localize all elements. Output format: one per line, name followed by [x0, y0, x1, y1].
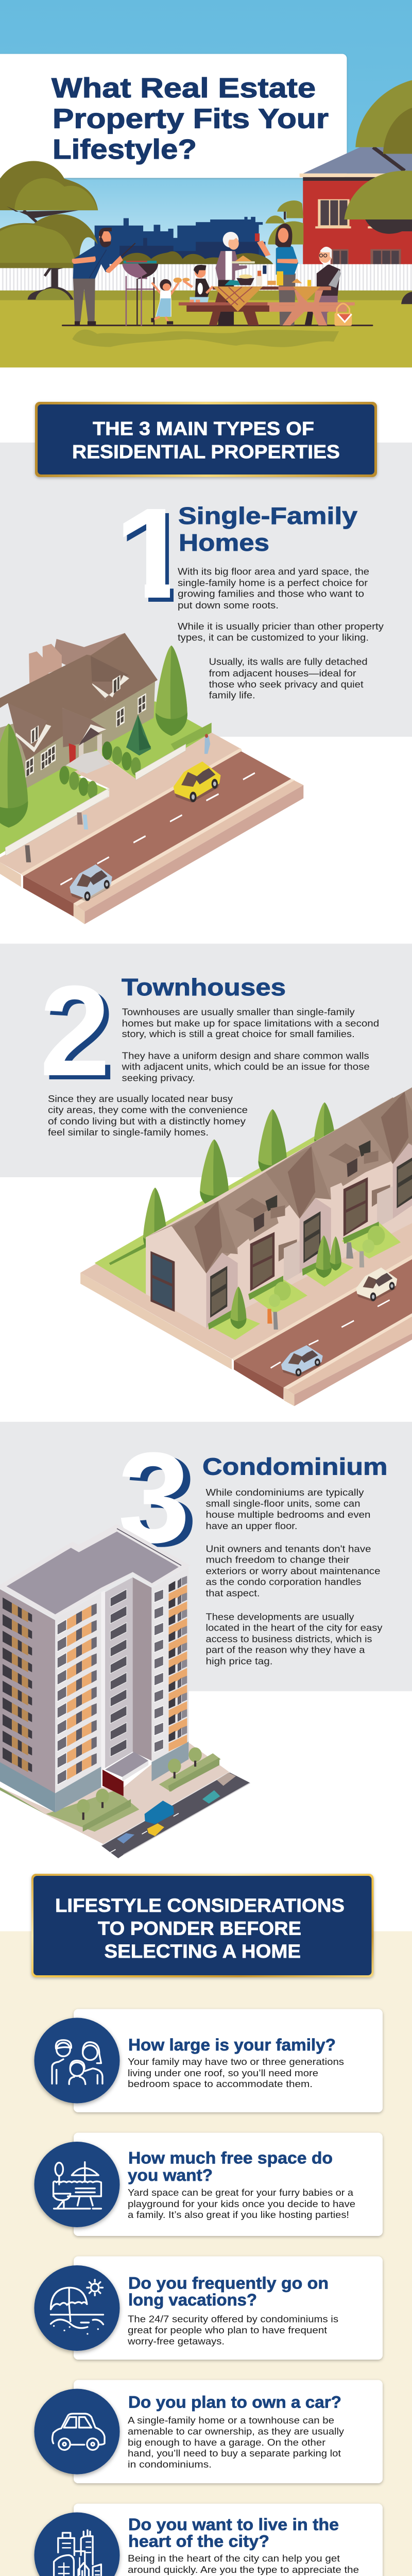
illustration: condominium tower	[0, 1524, 250, 1858]
text block: townhouses description: of condo living but with a distinctly homey	[48, 1116, 246, 1126]
person: boy	[183, 265, 213, 309]
icon: yard with picnic table	[54, 2162, 101, 2209]
section banner: 3 main types: THE 3 MAIN TYPES OF	[93, 418, 314, 439]
text block: condominium description: small single-floor units, some can	[206, 1498, 360, 1509]
text block: townhouses description: with adjacent units, which could be an issue for those	[122, 1062, 370, 1072]
text block: single-family description: Usually, its walls are fully detached	[209, 656, 368, 667]
card: car ownership	[34, 2380, 383, 2483]
grill	[122, 261, 158, 326]
icon: beach umbrella and sun	[50, 2280, 103, 2334]
text block: condominium description: have an upper floor.	[206, 1521, 298, 1531]
numeral 3: 3	[125, 1429, 197, 1573]
numeral 2: 2	[45, 963, 115, 1107]
vehicles on condo street	[117, 1772, 236, 1843]
heading: condominium: Condominium	[202, 1453, 388, 1480]
person: man grilling	[72, 228, 135, 326]
front gardens and shrubs	[208, 1222, 401, 1340]
card: vacations: great for people who plan to have frequent	[128, 2325, 327, 2335]
numeral 1: 1	[114, 481, 191, 625]
card: vacations	[34, 2257, 383, 2360]
card: free space: Yard space can be great for your furry babies or a	[128, 2187, 354, 2198]
city skyline	[95, 217, 265, 264]
card: heart of the city: around quickly. Are you the type to appreciate the	[128, 2564, 359, 2575]
numeral 1	[124, 509, 174, 602]
text block: condominium description: as the condo corporation handles	[206, 1577, 362, 1587]
card: vacations: worry-free getaways.	[127, 2336, 225, 2346]
pedestrians	[25, 734, 210, 862]
card: free space: a family. It’s also great if you like hosting parties!	[128, 2209, 349, 2220]
heading: single-family homes: Homes	[179, 529, 269, 556]
text block: condominium description: located in the heart of the city for easy	[206, 1623, 382, 1633]
street and grounds	[0, 1743, 250, 1858]
pedestrians	[267, 1242, 364, 1330]
card: vacations: Do you frequently go on	[128, 2274, 329, 2292]
section banner: 3 main types	[35, 402, 377, 477]
person: woman with drink	[255, 224, 298, 326]
section banner: lifestyle considerations: SELECTING A HOME	[104, 1941, 301, 1962]
card: car ownership: in condominiums.	[128, 2459, 212, 2470]
text block: single-family description: growing families and those who want to	[178, 588, 364, 599]
heading: single-family homes	[178, 502, 357, 556]
icon: city buildings	[54, 2530, 101, 2576]
text block: townhouses description: city areas, they come with the convenience	[48, 1105, 248, 1115]
card: free space: How much free space do	[128, 2148, 333, 2167]
right trees	[344, 80, 412, 304]
bush line behind fence	[119, 251, 273, 264]
card: family size: Your family may have two or three generations	[128, 2056, 344, 2067]
card: heart of the city: Do you want to live in the	[128, 2515, 339, 2534]
text block: condominium description: exteriors or worry about maintenance	[206, 1566, 380, 1576]
card: car ownership: A single-family home or a townhouse can be	[128, 2415, 334, 2426]
text block: single-family description: those who seek privacy and quiet	[209, 679, 364, 689]
title text: Lifestyle?	[53, 134, 197, 165]
section banner: lifestyle considerations: TO PONDER BEFORE	[98, 1918, 301, 1939]
title text: Property Fits Your	[53, 103, 329, 134]
text block: single-family description: While it is usually pricier than other property	[178, 621, 384, 632]
numeral 3: 3	[118, 1426, 190, 1569]
illustration: row of townhouses and street	[80, 1065, 412, 1406]
white picket fences	[5, 744, 186, 856]
text block: townhouses description: story, which is still a great choice for small families.	[122, 1029, 355, 1039]
text block: townhouses description: Townhouses are usually smaller than single-family	[122, 1007, 355, 1017]
text block: condominium description: While condominiums are typically	[206, 1487, 364, 1498]
text block: townhouses description: seeking privacy.	[122, 1073, 195, 1083]
text block: townhouses description: homes but make up for space limitations with a second	[122, 1018, 379, 1028]
card: free space	[34, 2133, 383, 2236]
text block: single-family description: With its big floor area and yard space, the	[178, 567, 369, 577]
blue car	[281, 1345, 323, 1377]
card: family size	[34, 2009, 383, 2112]
icon: car	[53, 2414, 105, 2450]
card: heart of the city: Being in the heart of the city can help you get	[128, 2553, 340, 2564]
text block: condominium description	[206, 1487, 382, 1666]
panel: townhouses background	[0, 944, 412, 1177]
trees and shrubs	[0, 646, 187, 827]
lawn	[0, 291, 412, 367]
text block: condominium description: house multiple bedrooms and even	[206, 1510, 371, 1520]
person: grandmother	[215, 232, 255, 326]
small trees behind house	[265, 200, 303, 244]
text block: single-family description: types, it can be customized to your liking.	[178, 632, 369, 642]
text block: townhouses description: Since they are usually located near busy	[48, 1094, 233, 1104]
card: free space: playground for your kids once you decide to have	[128, 2198, 355, 2209]
text block: townhouses description: They have a uniform design and share common walls	[122, 1050, 369, 1061]
card: family size: How large is your family?	[128, 2036, 336, 2054]
card: heart of the city: heart of the city?	[128, 2532, 269, 2551]
card: car ownership: hand, you’ll need to buy a separate parking lot	[128, 2448, 341, 2459]
title card	[0, 54, 347, 178]
text block: condominium description: much freedom to change their	[206, 1555, 349, 1565]
card: car ownership: Do you plan to own a car?	[128, 2393, 341, 2412]
panel: condominium background	[0, 1422, 412, 1691]
card: free space: you want?	[128, 2166, 213, 2184]
heading: single-family homes: Single-Family	[178, 502, 357, 529]
person: girl	[151, 278, 190, 325]
text block: townhouses description	[48, 1007, 379, 1138]
card: family size: bedroom space to accommodate them.	[128, 2078, 313, 2089]
text block: townhouses description: feel similar to single-family homes.	[48, 1127, 209, 1138]
text block: condominium description: These developments are usually	[206, 1612, 354, 1622]
house building	[0, 633, 158, 788]
card: car ownership: amenable to car ownership, as they are usually	[128, 2426, 345, 2436]
text block: condominium description: Unit owners and tenants don't have	[206, 1544, 371, 1554]
panel: lifestyle considerations background	[0, 1931, 412, 2576]
card: heart of the city	[34, 2504, 383, 2576]
text block: condominium description: access to business districts, which is	[206, 1634, 372, 1644]
left trees	[0, 161, 98, 300]
text block: condominium description: part of the reason why they have a	[206, 1645, 366, 1655]
picket fence	[0, 264, 412, 291]
back row trees	[143, 1103, 335, 1255]
text block: single-family description: single-family home is a perfect choice for	[178, 578, 368, 588]
card: family size: living under one roof, so you’ll need more	[128, 2067, 318, 2078]
numeral 2: 2	[40, 959, 110, 1103]
red house	[300, 147, 412, 265]
text block: condominium description: that aspect.	[206, 1588, 260, 1598]
title text	[52, 73, 329, 165]
card: vacations: long vacations?	[128, 2291, 257, 2309]
card: vacations: The 24/7 security offered by condominiums is	[128, 2314, 338, 2325]
text block: single-family description: put down some roots.	[178, 600, 279, 611]
text block: single-family description: family life.	[209, 690, 255, 701]
picnic basket	[334, 303, 352, 326]
heading: townhouses: Townhouses	[122, 974, 286, 1001]
text block: single-family description: from adjacent houses—ideal for	[209, 668, 356, 679]
section banner: lifestyle considerations	[31, 1874, 374, 1977]
card: car ownership: big enough to have a garage. On the other	[128, 2437, 325, 2448]
illustration: single-family house and street	[0, 633, 303, 924]
section banner: 3 main types: RESIDENTIAL PROPERTIES	[72, 441, 340, 462]
numeral 1: 1	[117, 485, 195, 629]
person: grandfather	[305, 247, 341, 326]
street trees	[77, 1748, 202, 1820]
townhouse row	[146, 1065, 412, 1328]
picnic table with food	[179, 265, 355, 326]
icon: family	[52, 2040, 102, 2084]
tower body	[0, 1524, 191, 1812]
section banner: lifestyle considerations: LIFESTYLE CONSIDERATIONS	[55, 1895, 345, 1916]
yellow car	[174, 761, 221, 803]
ground shadow line	[62, 325, 373, 326]
hero illustration: family barbecue in a backyard	[0, 0, 412, 367]
text block: condominium description: high price tag.	[206, 1656, 273, 1666]
panel: single-family homes background	[0, 443, 412, 737]
text block: single-family description	[178, 567, 384, 701]
silver blue car	[70, 865, 112, 901]
cream car	[356, 1267, 397, 1301]
title text: What Real Estate	[52, 73, 316, 104]
block and road	[232, 1255, 412, 1406]
